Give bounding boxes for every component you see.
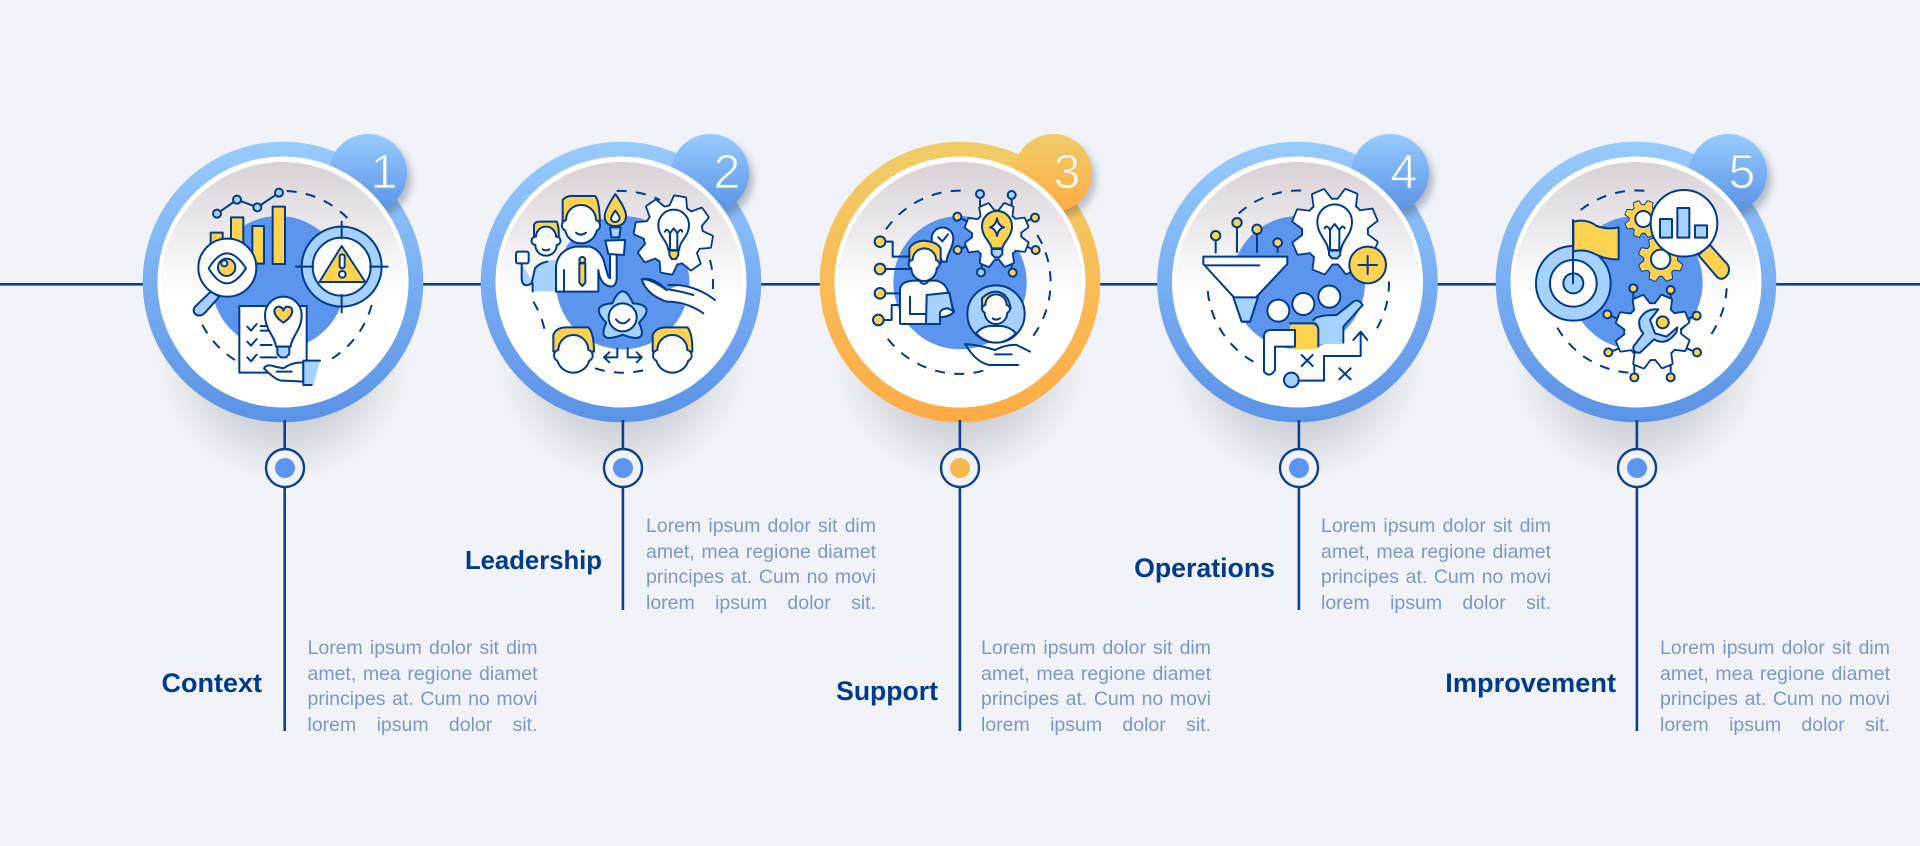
text block: Support: Lorem ipsum dolor sit dim [981, 637, 1211, 659]
step 3 circle [820, 134, 1100, 476]
text block: Operations: principes at. Cum no movi [1321, 566, 1551, 588]
step 1 circle [143, 134, 423, 476]
text block: Leadership: lorem ipsum dolor sit. [646, 592, 876, 614]
step 2 stem and node [604, 420, 642, 610]
number 2: 2 [714, 146, 740, 199]
text block: Improvement: lorem ipsum dolor sit. [1660, 714, 1890, 736]
text block: Support: lorem ipsum dolor sit. [981, 714, 1211, 736]
number 4: 4 [1391, 146, 1417, 199]
text block: Improvement: principes at. Cum no movi [1660, 688, 1890, 710]
number 5: 5 [1729, 146, 1755, 199]
text block: Leadership [646, 515, 876, 614]
step 5 stem and node [1618, 420, 1656, 731]
horizontal connector line [0, 283, 1920, 286]
heading: Operations: Operations [1134, 553, 1275, 583]
number 3: 3 [1054, 146, 1080, 199]
number 1: 1 [371, 146, 397, 199]
text block: Operations [1321, 515, 1551, 614]
text block: Support [981, 637, 1211, 736]
step 2 circle [481, 134, 761, 476]
text block: Operations: amet, mea regione diamet [1321, 540, 1551, 562]
text block: Context: Lorem ipsum dolor sit dim [308, 637, 538, 659]
text block: Improvement: Lorem ipsum dolor sit dim [1660, 637, 1890, 659]
step 4 circle [1157, 134, 1438, 476]
step 3 stem and node [941, 420, 979, 731]
text block: Support: amet, mea regione diamet [981, 662, 1211, 684]
icon: support [873, 190, 1051, 374]
text block: Support: principes at. Cum no movi [981, 688, 1211, 710]
icon: leadership team [516, 191, 718, 373]
icon: chart, eye, warning target, checklist [194, 189, 388, 385]
heading: Improvement: Improvement [1445, 667, 1616, 698]
text block: Context: lorem ipsum dolor sit. [308, 714, 538, 736]
text block: Operations: lorem ipsum dolor sit. [1321, 592, 1551, 614]
text block: Leadership: principes at. Cum no movi [646, 566, 876, 588]
text block: Leadership: amet, mea regione diamet [646, 540, 876, 562]
text block: Improvement [1660, 637, 1890, 736]
heading: Support: Support [836, 676, 938, 706]
heading: Context: Context [162, 668, 262, 698]
text block: Context [308, 637, 538, 736]
text block: Operations: Lorem ipsum dolor sit dim [1321, 515, 1551, 537]
text block: Leadership: Lorem ipsum dolor sit dim [646, 515, 876, 537]
icon: funnel, idea, team [1203, 176, 1391, 387]
step 5 circle [1496, 134, 1776, 476]
step 4 stem and node [1280, 420, 1318, 610]
text block: Improvement: amet, mea regione diamet [1660, 662, 1890, 684]
text block: Context: amet, mea regione diamet [308, 662, 538, 684]
heading: Leadership: Leadership [465, 547, 602, 575]
step 1 stem and node [266, 420, 304, 731]
icon: target flag, gears, magnifier [1536, 190, 1729, 381]
text block: Context: principes at. Cum no movi [308, 688, 538, 710]
